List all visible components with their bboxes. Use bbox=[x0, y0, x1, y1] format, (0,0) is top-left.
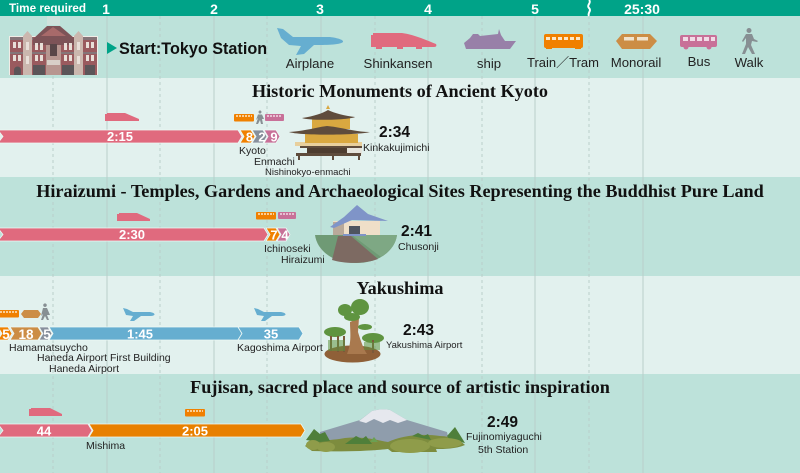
icon: monorail small bbox=[21, 310, 41, 318]
time axis header: 2 bbox=[210, 1, 218, 17]
icon: walk small bbox=[256, 111, 264, 124]
label: 5th Station: 5th Station bbox=[478, 444, 528, 456]
icon: Tokyo Station building bbox=[9, 16, 98, 75]
legend: train and tram: Train／Tram bbox=[527, 55, 599, 70]
icon: train bbox=[544, 34, 583, 49]
travel time: 2:49: 2:49 bbox=[487, 414, 518, 431]
time axis header: 3 bbox=[316, 1, 324, 17]
bar: 2:30 bbox=[0, 228, 268, 241]
value: 2: 2 bbox=[258, 130, 266, 144]
label: Haneda Airport First Building: Haneda Airport First Building bbox=[37, 352, 171, 364]
panel: Kyoto bbox=[0, 81, 548, 178]
value: 9: 9 bbox=[270, 130, 278, 144]
icon: airplane small 2 bbox=[254, 308, 286, 321]
legend: bus: Bus bbox=[688, 54, 711, 69]
value: 7: 7 bbox=[270, 228, 278, 242]
heading: Kyoto: Historic Monuments of Ancient Kyoto bbox=[252, 81, 548, 101]
label: Chusonji: Chusonji bbox=[398, 241, 439, 253]
bar: 9 bbox=[264, 130, 280, 143]
value: 5 walk: 5 bbox=[43, 327, 51, 342]
bar: 35 bbox=[238, 327, 303, 340]
time axis header bbox=[0, 0, 800, 17]
icon: airplane small bbox=[123, 308, 154, 321]
value: 8: 8 bbox=[246, 130, 253, 144]
label: Enmachi: Enmachi bbox=[254, 156, 295, 168]
bar: 2:15 bbox=[0, 130, 242, 143]
icon: ship bbox=[464, 29, 516, 49]
value: 2:30: 2:30 bbox=[119, 227, 145, 242]
value: 44: 44 bbox=[37, 424, 52, 438]
travel time: 2:43: 2:43 bbox=[403, 322, 434, 339]
bar: 2 bbox=[252, 130, 267, 143]
legend: monorail: Monorail bbox=[611, 55, 661, 70]
time axis header: 1 bbox=[102, 1, 110, 17]
bar: 2:05 bbox=[89, 424, 305, 437]
icon: shinkansen bbox=[371, 33, 436, 49]
bar: 18 bbox=[10, 327, 42, 340]
label: Ichinoseki: Ichinoseki bbox=[264, 243, 311, 255]
label: Yakushima Airport: Yakushima Airport bbox=[386, 340, 463, 351]
heading: Fujisan: Fujisan, sacred place and source of artistic inspiration bbox=[190, 377, 610, 397]
value: 4: 4 bbox=[281, 228, 289, 242]
icon: monorail bbox=[616, 34, 657, 49]
start label: Start:Tokyo Station bbox=[119, 40, 267, 58]
label: Kinkakujimichi: Kinkakujimichi bbox=[363, 142, 430, 154]
travel time: 2:41: 2:41 bbox=[401, 223, 432, 240]
value: 18: 18 bbox=[18, 327, 34, 342]
legend: walk: Walk bbox=[735, 55, 764, 70]
bar: 7 bbox=[266, 228, 280, 241]
time axis header: 4 bbox=[424, 1, 432, 17]
icon: Kinkakuji temple bbox=[289, 105, 370, 160]
bar: 1:45 bbox=[49, 327, 242, 340]
value: 5: 5 bbox=[2, 327, 10, 342]
icon: train small bbox=[256, 212, 276, 220]
icon: bus bbox=[680, 35, 717, 50]
value: 35: 35 bbox=[264, 326, 278, 342]
icon: Mount Fuji bbox=[305, 409, 465, 453]
value: 1:45: 1:45 bbox=[127, 326, 153, 342]
time axis header: 25:30 bbox=[624, 1, 660, 17]
value: 2:05: 2:05 bbox=[182, 424, 208, 438]
legend: shinkansen: Shinkansen bbox=[364, 56, 432, 71]
icon: train small bbox=[185, 409, 205, 416]
icon: walk bbox=[742, 28, 758, 54]
time axis header: 5 bbox=[531, 1, 539, 17]
label: Mishima: Mishima bbox=[86, 440, 125, 452]
label: Hiraizumi: Hiraizumi bbox=[281, 254, 325, 266]
icon: Chusonji temple bbox=[315, 205, 397, 263]
label: Hamamatsuycho: Hamamatsuycho bbox=[9, 342, 88, 354]
icon: train small bbox=[234, 114, 254, 122]
label: Kagoshima Airport: Kagoshima Airport bbox=[237, 342, 323, 354]
icon: shinkansen small bbox=[117, 213, 150, 221]
panel: Fujisan bbox=[0, 377, 610, 456]
panel: Hiraizumi bbox=[0, 181, 764, 266]
label: Kyoto: Kyoto bbox=[239, 145, 266, 157]
bar: 5 walk bbox=[39, 327, 52, 340]
legend: airplane: Airplane bbox=[286, 56, 334, 71]
icon: Yakushima cedar bbox=[324, 299, 384, 362]
label: Fujinomiyaguchi: Fujinomiyaguchi bbox=[466, 431, 542, 443]
panel: Yakushima bbox=[0, 278, 463, 375]
label: Nishinokyo-enmachi: Nishinokyo-enmachi bbox=[265, 167, 351, 178]
start marker bbox=[107, 42, 117, 54]
icon: shinkansen small bbox=[105, 113, 139, 121]
label: Haneda Airport: Haneda Airport bbox=[49, 363, 119, 375]
bar: 44 bbox=[0, 424, 92, 437]
time axis header: Time required bbox=[9, 2, 86, 15]
heading: Hiraizumi: Hiraizumi - Temples, Gardens and Archaeological Sites Representing the Buddhist Pure Land bbox=[36, 181, 764, 201]
bar: 5 orange bbox=[0, 327, 12, 340]
icon: airplane bbox=[277, 28, 343, 55]
icon: bus small bbox=[278, 212, 296, 219]
legend: ship: ship bbox=[477, 56, 501, 71]
bar: 4 bbox=[277, 228, 290, 241]
bar: 8 bbox=[240, 130, 255, 143]
icon: train small bbox=[0, 310, 19, 318]
icon: bus small bbox=[265, 114, 284, 121]
value: 2:15: 2:15 bbox=[107, 129, 133, 144]
icon: walk small bbox=[41, 303, 50, 320]
icon: shinkansen small bbox=[29, 408, 62, 416]
heading: Yakushima: Yakushima bbox=[357, 278, 443, 298]
travel time: 2:34: 2:34 bbox=[379, 124, 410, 141]
